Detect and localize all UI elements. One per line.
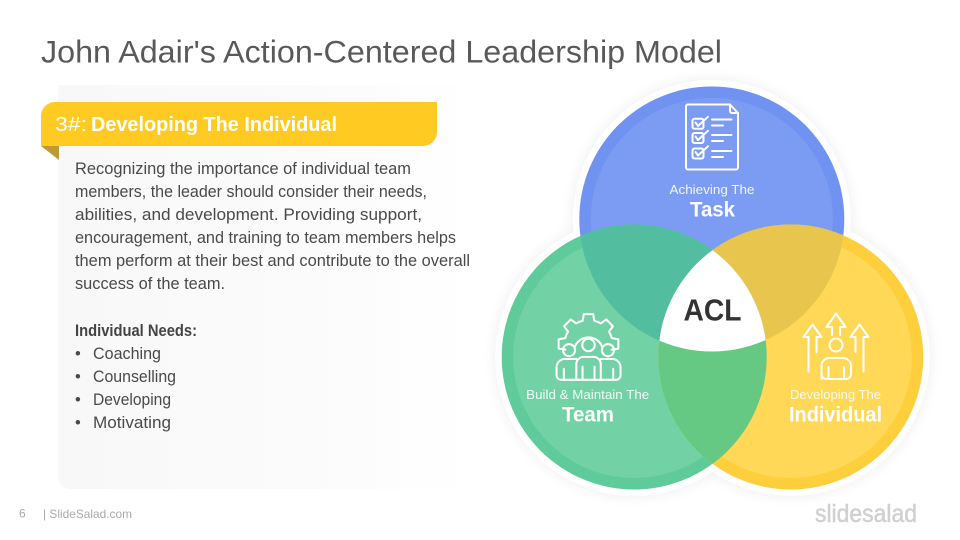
circle: task [579,86,844,352]
banner text: Developing The Individual [91,114,337,136]
venn halo shadow [495,80,930,496]
individual needs list: Motivating [93,414,171,432]
logo wordmark: slidesalad [815,500,917,528]
body paragraph: members, the leader should consider their needs, [75,183,427,201]
banner text: 3#: [55,114,87,136]
overlap: task and team [580,224,712,341]
body paragraph: Recognizing the importance of individual team [75,160,411,178]
title: John Adair's Action-Centered Leadership Model [41,34,722,70]
individual needs list: • [75,391,81,409]
label: build and maintain the team [526,388,649,427]
body paragraph: abilities, and development. Providing support, [75,206,422,224]
individual needs list [75,322,197,432]
banner shape [41,102,437,146]
individual needs list: Counselling [93,368,176,386]
heading banner [41,102,437,160]
label: achieving the task [670,183,755,222]
individual needs list: • [75,414,81,432]
venn diagram [495,80,930,496]
center white region [659,250,766,352]
label: developing the individual: Individual [789,404,882,427]
individual needs list: • [75,368,81,386]
individual needs list: • [75,345,81,363]
icon: checklist [686,104,738,170]
label: achieving the task: Task [690,199,735,222]
individual needs list: Individual Needs: [75,322,197,340]
body paragraph [75,160,470,293]
body paragraph: them perform at their best and contribute to the overall [75,252,470,270]
individual needs list: Coaching [93,345,161,363]
individual needs list: Developing [93,391,171,409]
body paragraph: success of the team. [75,275,225,293]
overlap: task and individual [659,224,844,340]
body paragraph: encouragement, and training to team members helps [75,229,456,247]
ACL label: ACL [684,292,742,328]
circle: team [502,224,767,490]
label: developing the individual [789,388,882,427]
footer page number: 6 [19,506,26,520]
icon: team gear [557,314,621,380]
label: build and maintain the team: Team [562,404,614,427]
label: achieving the task: Achieving The [670,183,755,197]
icon: individual growth arrows [804,314,868,379]
circle: individual [658,224,923,490]
banner fold [41,146,59,160]
label: build and maintain the team: Build & Maintain The [526,388,649,402]
label: developing the individual: Developing The [790,388,881,402]
overlap: team and individual [658,250,767,464]
venn white halo [495,80,930,496]
footer source: | SlideSalad.com [43,507,132,521]
panel: text background [58,85,470,489]
